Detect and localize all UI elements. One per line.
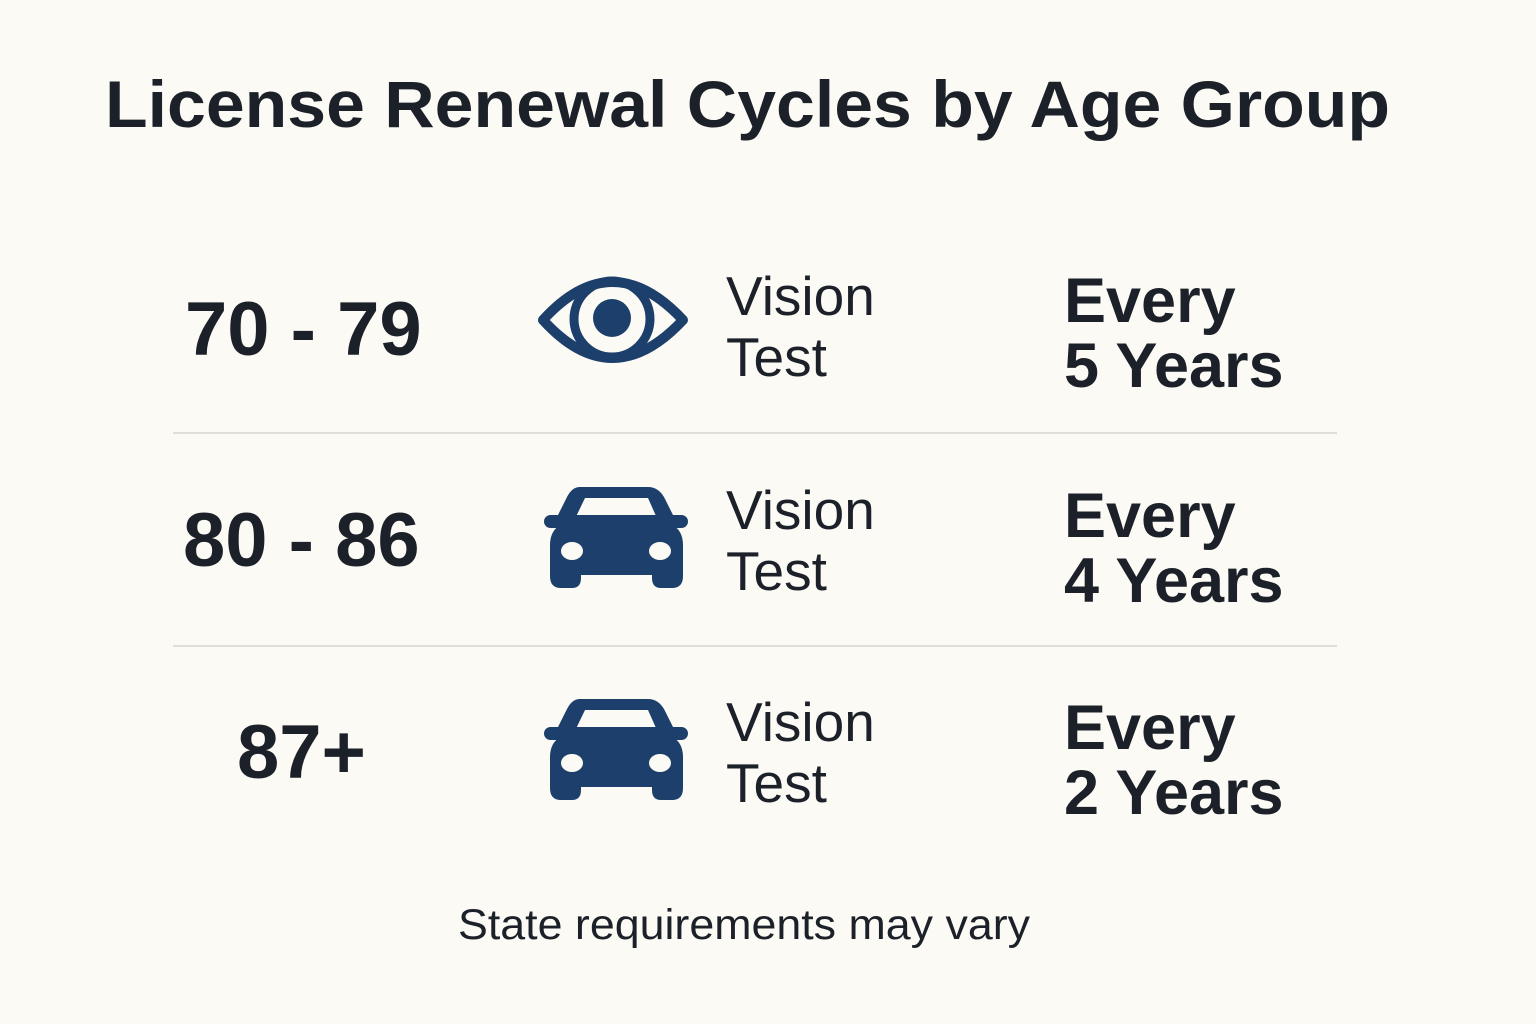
requirement: vision test: Vision	[726, 265, 875, 327]
icon: car	[544, 699, 688, 800]
requirement: vision test: Vision	[726, 691, 875, 753]
row: 80-86	[183, 479, 1284, 616]
cycle: every 2 years: 2 Years	[1064, 758, 1284, 828]
icon: eye	[543, 281, 683, 358]
row: 87+	[237, 691, 1284, 828]
cycle: every 2 years: Every	[1064, 693, 1236, 763]
requirement: vision test: Vision	[726, 479, 875, 541]
cycle: every 4 years: Every	[1064, 481, 1236, 551]
requirement: vision test: Test	[726, 540, 827, 602]
age label 87+: 87+	[237, 710, 366, 795]
age label 70-79: 70 - 79	[185, 287, 422, 372]
age label 80-86: 80 - 86	[183, 498, 420, 583]
title: License Renewal Cycles by Age Group	[105, 67, 1390, 141]
requirement: vision test: Test	[726, 752, 827, 814]
cycle: every 4 years: 4 Years	[1064, 546, 1284, 616]
footer note: State requirements may vary	[458, 901, 1031, 949]
row: 70-79	[185, 265, 1284, 401]
cycle: every 5 years: 5 Years	[1064, 331, 1284, 401]
requirement: vision test: Test	[726, 326, 827, 388]
icon: car	[544, 487, 688, 588]
cycle: every 5 years: Every	[1064, 266, 1236, 336]
